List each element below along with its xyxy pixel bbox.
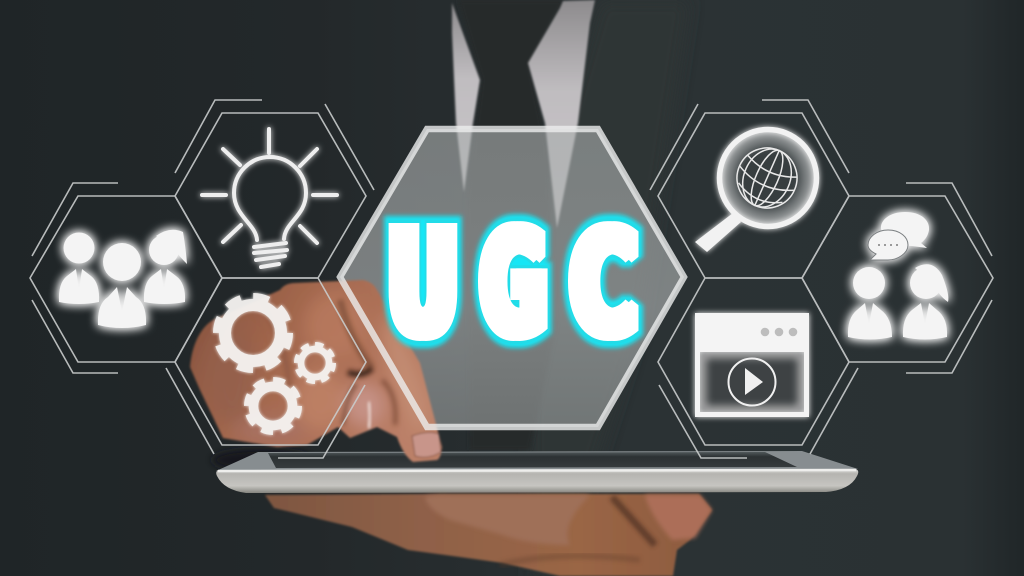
tie (458, 0, 565, 450)
white letters: C (568, 202, 634, 365)
hand under tablet (265, 494, 712, 576)
cyan glow: G (484, 202, 550, 365)
cyan channels (385, 202, 640, 366)
magnifier lens (695, 130, 816, 252)
white letters (385, 202, 640, 366)
shirt and tie (452, 0, 595, 450)
hexagon network outlines (30, 100, 993, 458)
play button (728, 358, 776, 406)
white letters: U (385, 203, 455, 366)
cyan channels: C (574, 202, 640, 365)
central hexagon border (340, 129, 684, 427)
person right (903, 264, 948, 340)
white letters: G (484, 202, 550, 365)
fingernail (412, 432, 441, 457)
title: UGC (385, 202, 640, 366)
medium gear (246, 380, 300, 432)
cyan glow (385, 202, 640, 366)
small gear (296, 344, 334, 382)
person left (59, 232, 99, 304)
icon: magnifying glass with globe (695, 130, 816, 252)
tablet screen (268, 452, 797, 468)
tablet top surface (216, 451, 858, 471)
icon: light bulb (202, 129, 337, 267)
curled fingernail (368, 402, 370, 428)
white letters: U (391, 203, 461, 366)
icon: two people talking (848, 212, 948, 340)
cyan glow: C (568, 202, 634, 365)
knuckle creases (262, 300, 395, 425)
cyan channels: C (568, 202, 634, 365)
dark shadow above tablet, left (212, 449, 312, 471)
shirt left collar (452, 3, 480, 192)
cyan channels: G (484, 202, 550, 365)
thumb of lower hand (425, 495, 590, 545)
cyan channels: U (385, 203, 455, 366)
tablet (216, 451, 858, 493)
window dots (761, 328, 797, 336)
cyan channels: U (391, 203, 461, 366)
cyan glow: C (574, 202, 640, 365)
icon: video player window (695, 313, 809, 417)
finger highlights (227, 296, 422, 443)
globe (727, 138, 807, 218)
white letters: C (574, 202, 640, 365)
person right with ponytail (144, 230, 187, 304)
shirt right collar (528, 0, 595, 228)
cyan glow: U (391, 203, 461, 366)
cyan glow: G (478, 202, 544, 365)
large speech bubble (881, 212, 929, 248)
person middle (98, 243, 146, 328)
pointing hand (185, 275, 450, 470)
icon: gears (216, 296, 334, 432)
small speech bubble (868, 230, 908, 260)
central hexagon fill (340, 129, 684, 427)
white letters: G (478, 202, 544, 365)
cyan glow: U (385, 203, 455, 366)
cyan channels: G (478, 202, 544, 365)
tablet side (216, 469, 858, 493)
person left (848, 267, 892, 340)
screen area (700, 352, 804, 412)
large gear (216, 296, 290, 370)
window frame (695, 313, 809, 417)
icon: team of three people (59, 230, 187, 328)
